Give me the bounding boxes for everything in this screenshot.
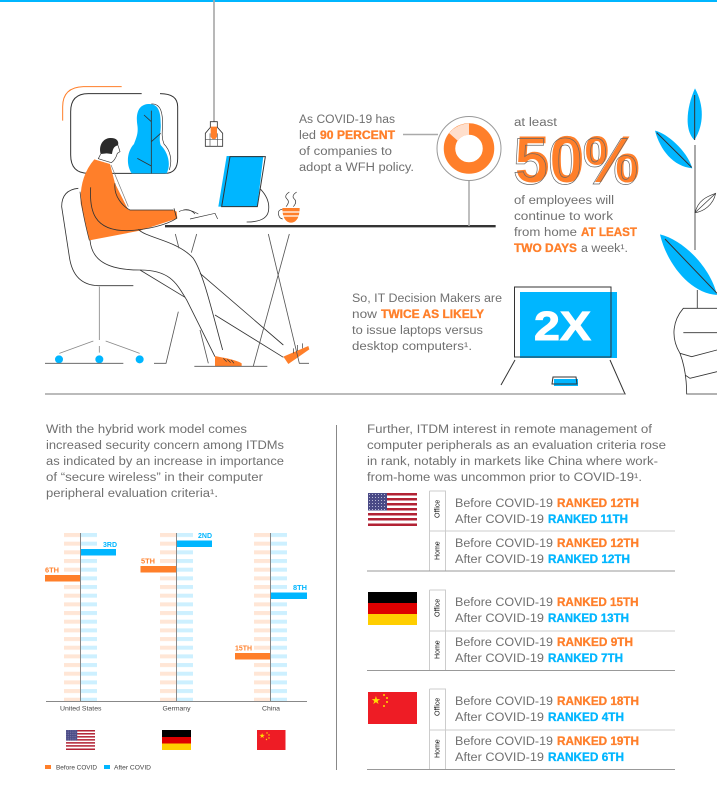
ranking: Germany: Before COVID-19 xyxy=(455,637,553,649)
ranking: China: RANKED 4TH xyxy=(548,712,624,724)
chart legend: After COVID xyxy=(114,764,151,772)
bar chart: security ranking xyxy=(45,533,307,712)
text: 50 percent: 50% xyxy=(515,122,640,196)
ranking: China xyxy=(367,689,675,770)
ranking: Germany: Home xyxy=(434,640,442,659)
text: 50 percent: 50% xyxy=(513,124,638,198)
paragraph: remote management: in rank, notably in markets like China where work- xyxy=(367,456,658,468)
illustration: plant xyxy=(655,88,717,394)
paragraph: remote management: from-home was uncommon prior to COVID-19¹. xyxy=(367,472,642,484)
table frame xyxy=(429,689,675,769)
ranking: China: RANKED 19TH xyxy=(557,736,639,748)
chart flag: China xyxy=(257,730,286,750)
chart flag: United States xyxy=(66,730,95,750)
table frame xyxy=(429,590,675,670)
ranking: Germany xyxy=(367,590,675,670)
paragraph: security concern: With the hybrid work model comes xyxy=(46,424,247,436)
bars: United States xyxy=(45,542,117,582)
ranking: China: RANKED 18TH xyxy=(557,696,639,708)
text: twice as likely: So, IT Decision Makers are xyxy=(352,293,502,305)
text: 90 percent: 90 PERCENT xyxy=(320,130,395,142)
icon: laptop 2X xyxy=(501,287,625,394)
bars: Germany xyxy=(140,533,212,572)
axis labels: United States xyxy=(60,706,102,712)
paragraph: security concern: as indicated by an increase in importance xyxy=(46,456,284,468)
flag xyxy=(368,493,417,526)
ranking: United States: Home xyxy=(434,541,442,560)
ground line xyxy=(45,393,626,395)
ranking: Germany: RANKED 13TH xyxy=(548,613,629,625)
chart legend: Before COVID xyxy=(56,764,97,772)
ranking: China: Before COVID-19 xyxy=(455,736,553,748)
axis labels: Germany xyxy=(162,706,191,712)
paragraph: security concern xyxy=(46,424,284,500)
text: 50 percent: AT LEAST xyxy=(581,227,637,239)
ranking: Germany: RANKED 9TH xyxy=(557,637,633,649)
bars: China: 15TH xyxy=(235,646,252,652)
coffee cup xyxy=(278,192,300,223)
chair xyxy=(45,188,178,363)
monitor xyxy=(218,156,269,222)
text: 90 percent xyxy=(299,114,414,174)
text: 50 percent: continue to work xyxy=(514,211,613,223)
text: 50 percent: from home xyxy=(514,227,577,239)
desk legs xyxy=(175,234,309,366)
text: twice as likely: now xyxy=(352,309,378,321)
chart flag: China: ★ xyxy=(259,732,265,740)
flag xyxy=(368,592,417,625)
ranking: China: After COVID-19 xyxy=(455,752,544,764)
ranking: United States: Before COVID-19 xyxy=(455,538,553,550)
ranking: Germany: RANKED 7TH xyxy=(548,653,623,665)
donut stat graphic xyxy=(403,116,501,226)
ranking: Germany: After COVID-19 xyxy=(455,653,544,665)
bars: Germany: 2ND xyxy=(198,533,212,540)
flag: ★ xyxy=(371,695,381,707)
text: twice as likely xyxy=(352,293,502,353)
text: twice as likely: desktop computers¹. xyxy=(352,341,472,353)
axis labels: China xyxy=(262,706,280,712)
paragraph: security concern: peripheral evaluation criteria¹. xyxy=(46,488,218,500)
axis labels xyxy=(60,706,280,712)
ranking: United States: RANKED 12TH xyxy=(548,554,630,566)
paragraph: remote management xyxy=(367,424,666,484)
bars: China: 8TH xyxy=(293,585,307,592)
bars: United States: 6TH xyxy=(45,568,59,574)
paragraph: security concern: of “secure wireless” in their computer xyxy=(46,472,263,484)
ranking: China: After COVID-19 xyxy=(455,712,544,724)
table frame xyxy=(429,491,675,571)
rows: Before COVID-19 xyxy=(455,597,553,609)
ranking: United States: RANKED 11TH xyxy=(548,514,628,526)
labels: Office xyxy=(434,599,442,617)
illustration: person working at desk xyxy=(45,0,496,366)
top accent line xyxy=(0,0,717,2)
paragraph: remote management: Further, ITDM interest in remote management of xyxy=(367,424,653,436)
paragraph: remote management: computer peripherals as an evaluation criteria rose xyxy=(367,440,666,452)
chart legend xyxy=(45,764,151,772)
text: 50 percent: a week¹. xyxy=(581,243,628,255)
ranking: United States: After COVID-19 xyxy=(455,554,544,566)
ranking: Germany: RANKED 15TH xyxy=(557,597,638,609)
ranking: United States xyxy=(367,491,675,571)
text: twice as likely: to issue laptops versus xyxy=(352,325,483,337)
ranking: United States: RANKED 12TH xyxy=(557,538,639,550)
text: 90 percent: As COVID-19 has xyxy=(299,114,395,126)
labels: Office xyxy=(434,500,442,518)
text: 50 percent: TWO DAYS xyxy=(514,243,577,255)
text: twice as likely: TWICE AS LIKELY xyxy=(381,309,484,321)
ranking: United States: RANKED 12TH xyxy=(557,498,639,510)
window with tree xyxy=(63,87,178,173)
labels: Office xyxy=(434,698,442,716)
desk xyxy=(165,223,496,230)
icon: laptop 2X: 2X xyxy=(534,303,591,349)
person xyxy=(80,138,309,366)
text: 90 percent: led xyxy=(299,130,316,142)
paragraph: security concern: increased security concern among ITDMs xyxy=(46,440,284,452)
ranking: China: RANKED 6TH xyxy=(548,752,624,764)
text: 90 percent: adopt a WFH policy. xyxy=(299,162,414,174)
text: 90 percent: of companies to xyxy=(299,146,392,158)
column divider xyxy=(336,425,338,770)
text: 50 percent: of employees will xyxy=(514,195,614,207)
ranking: Germany: After COVID-19 xyxy=(455,613,544,625)
axes xyxy=(46,533,307,702)
bars: United States: 3RD xyxy=(103,542,117,549)
lamp xyxy=(205,0,223,146)
ranking: China: Home xyxy=(434,739,442,758)
text: 50 percent xyxy=(513,117,640,255)
ranking: United States: After COVID-19 xyxy=(455,514,544,526)
bars: Germany: 5TH xyxy=(141,558,155,566)
text: 50 percent: at least xyxy=(514,117,558,129)
rows: Before COVID-19 xyxy=(455,696,553,708)
stripes xyxy=(64,533,287,701)
flag xyxy=(368,692,417,724)
rows: Before COVID-19 xyxy=(455,498,553,510)
bars: China xyxy=(235,585,307,660)
chart flag: Germany xyxy=(162,730,191,750)
